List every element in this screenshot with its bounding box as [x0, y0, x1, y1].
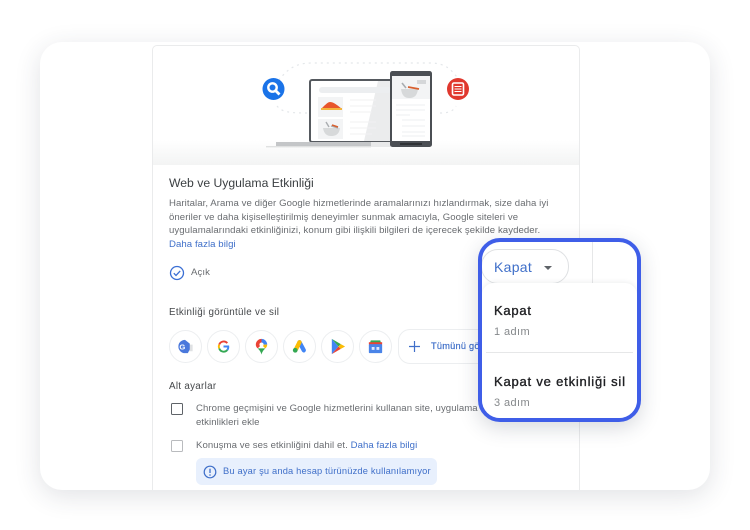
button label: Kapat [494, 259, 532, 275]
description text: uygulamalarındaki etkinliğinizi, konum gibi ilişkili bilgileri de içerecek şekilde kaydeder. [169, 225, 540, 236]
illustration gradient band [153, 140, 579, 165]
status label: Açık [191, 267, 210, 278]
description text: Daha fazla bilgi [169, 238, 236, 250]
icon: check circle [170, 266, 184, 280]
icon: news [359, 330, 392, 363]
vertical divider [592, 242, 593, 286]
icon: translate: G [179, 342, 185, 351]
icon: play [321, 330, 354, 363]
panel: settings page [152, 45, 580, 491]
item title: Kapat ve etkinliği sil [494, 374, 626, 389]
notice [196, 458, 437, 485]
dropdown menu [482, 283, 637, 422]
setting text: Konuşma ve ses etkinliğini dahil et. Daha fazla bilgi [196, 440, 417, 451]
illustration: devices and icons [262, 62, 469, 148]
heading: Web ve Uygulama Etkinliği [169, 176, 314, 190]
description text: Haritalar, Arama ve diğer Google hizmetlerinde aramalarınızı hızlandırmak, size daha iyi [169, 198, 548, 209]
icon: maps [245, 330, 278, 363]
setting text: etkinlikleri ekle [196, 417, 260, 428]
checkbox [171, 403, 183, 415]
icon: ads [283, 330, 316, 363]
dotted loop [275, 63, 458, 113]
description text [169, 198, 548, 250]
menu item: turn off and delete [494, 374, 626, 409]
icon: translate [169, 330, 202, 363]
setting text [196, 403, 481, 428]
icon: info [204, 466, 216, 478]
status: on [170, 266, 210, 280]
menu divider [486, 352, 633, 353]
product icon row [169, 329, 480, 364]
subheading: view and delete: Etkinliği görüntüle ve sil [169, 307, 279, 318]
callout: turn off menu [478, 238, 641, 422]
item title: Kapat [494, 303, 532, 318]
notice text: Bu ayar şu anda hesap türünüzde kullanılamıyor [223, 466, 431, 476]
icon: google [207, 330, 240, 363]
menu item: turn off [494, 303, 532, 338]
button: turn off [481, 249, 569, 284]
icon: plus [409, 341, 420, 352]
icon: search [262, 78, 284, 100]
icon: laptop [266, 80, 392, 147]
setting: voice activity [171, 440, 417, 452]
icon: dropdown arrow [544, 266, 552, 270]
icon: phone [390, 71, 432, 147]
button: view all [398, 329, 520, 364]
item steps: 3 adım [494, 397, 530, 409]
checkbox disabled [171, 440, 183, 452]
setting: chrome history [171, 403, 481, 428]
icon: document [447, 78, 469, 100]
card background [40, 42, 710, 490]
description text: öneriler ve daha kişiselleştirilmiş deneyimler sunmak amacıyla, Google siteleri ve [169, 212, 518, 222]
subheading: sub settings: Alt ayarlar [169, 381, 216, 392]
item steps: 1 adım [494, 326, 530, 338]
